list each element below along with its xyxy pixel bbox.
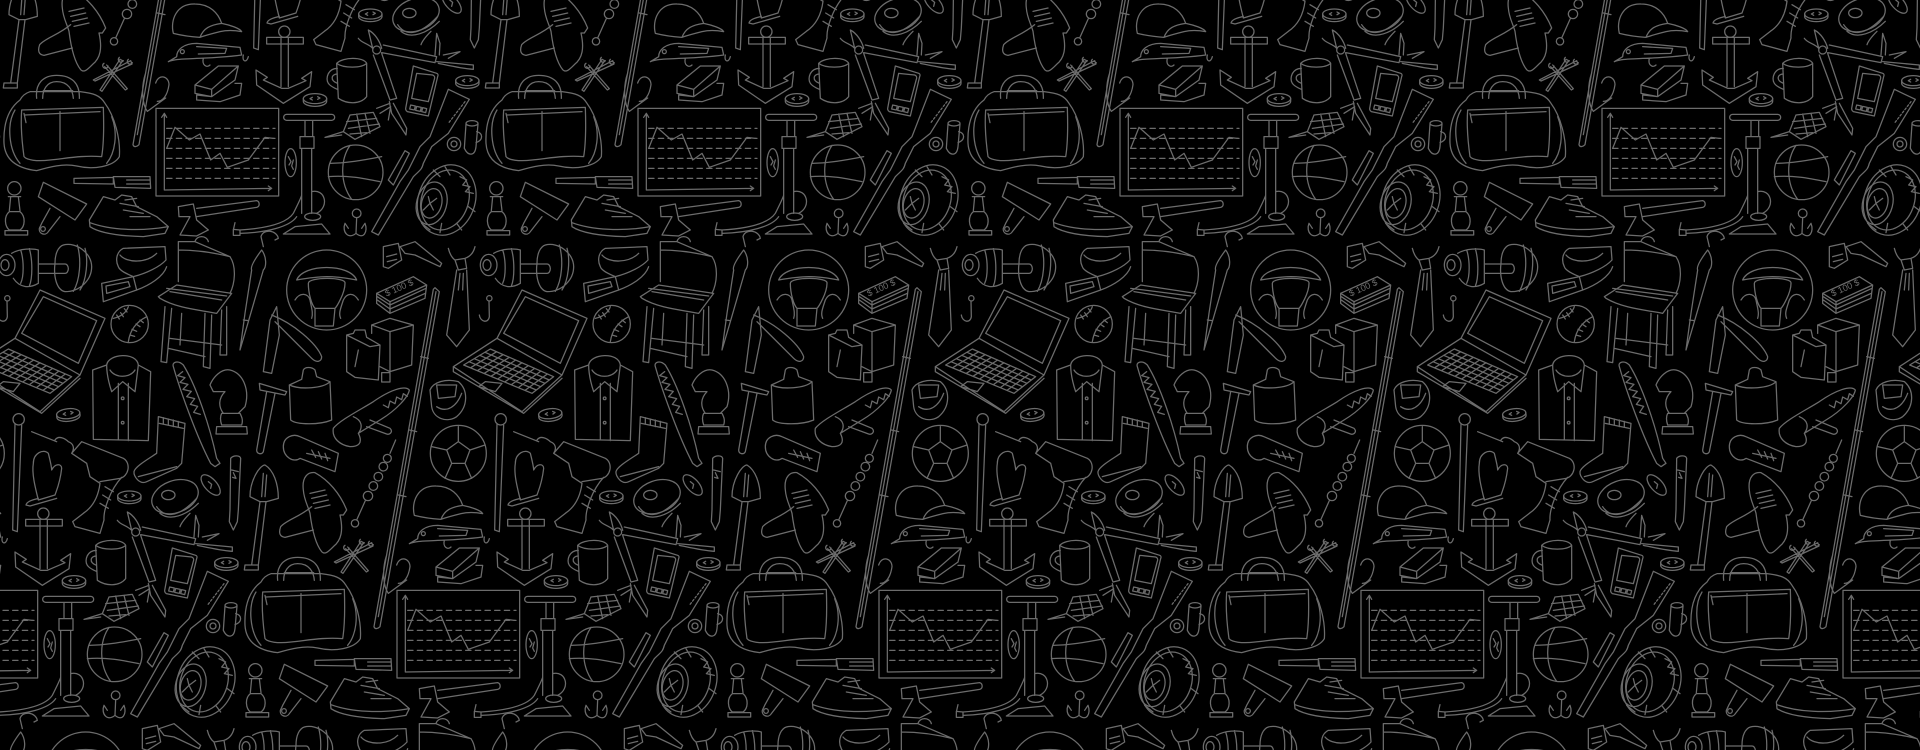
icon: straight razor	[263, 307, 322, 373]
pattern tile	[0, 4, 492, 629]
icon: fishing line spool	[147, 473, 203, 527]
icon: coin	[303, 94, 327, 106]
icon: sock	[134, 417, 185, 482]
icon: laptop	[0, 290, 105, 413]
icon: duffel bag	[4, 75, 120, 171]
icon: treble hook	[344, 209, 366, 236]
icon: bicycle pump	[233, 114, 335, 235]
icon: fishing rod	[374, 288, 439, 629]
upper doodle group	[4, 4, 486, 244]
icon: chess pawn	[5, 182, 28, 235]
icon: dumbbell	[0, 244, 92, 292]
icon: car key	[383, 242, 442, 268]
icon: coin	[456, 76, 479, 88]
icon: sneaker	[89, 195, 168, 237]
icon: banknote stack: $ 100 $	[383, 277, 415, 298]
icon: flask and box	[347, 318, 413, 382]
icon: shotgun shell	[447, 121, 482, 154]
icon: nails	[93, 57, 132, 91]
lower doodle group	[0, 231, 492, 629]
icon: walking stick	[13, 414, 24, 532]
icon: multi-tool	[358, 30, 473, 135]
icon: baseball	[111, 305, 148, 343]
icon: chess knight	[210, 370, 247, 434]
icon: cap	[173, 4, 242, 37]
icon: rifle	[372, 89, 469, 235]
icon: banknote stack	[377, 277, 427, 313]
icon: steering wheel	[287, 250, 367, 330]
icon: belt	[102, 247, 167, 302]
icon: shovel	[244, 465, 278, 570]
icon: bait feeder	[325, 112, 380, 139]
icon: fountain pen	[229, 456, 241, 530]
icon: coin on edge	[198, 472, 224, 498]
icon: coin on edge	[285, 149, 296, 177]
icon: necktie	[447, 247, 475, 347]
icon: folding stool	[158, 237, 234, 368]
icon: kebab skewer	[351, 440, 396, 527]
icon: coin	[118, 491, 141, 504]
icon: boxing glove	[283, 435, 338, 472]
icon: umbrella	[240, 231, 278, 350]
icon: mug	[327, 58, 367, 103]
icon: axe	[178, 201, 259, 236]
icon: hammer	[257, 383, 287, 454]
icon: basketball	[328, 145, 383, 200]
icon: fishing lure	[168, 43, 248, 66]
icon: dress shoes	[280, 473, 347, 553]
icon: wristwatch	[408, 156, 486, 244]
icon: phone	[406, 66, 438, 116]
chart: stock board	[156, 108, 279, 196]
icon: bricks	[195, 66, 242, 102]
icon: soccer ball	[430, 425, 486, 481]
icon: baseball bat	[173, 362, 220, 467]
icon: coin	[56, 407, 81, 423]
icon: hip flask	[289, 367, 332, 424]
icon: oven mitt	[26, 451, 62, 506]
icon: screwdriver	[74, 177, 151, 188]
icon: small hook	[479, 296, 492, 321]
icon: angle grinder	[333, 388, 409, 447]
icon: scraper	[38, 182, 87, 234]
icon: folded shirt	[93, 356, 151, 441]
icon: signet ring	[430, 380, 466, 420]
icon: power drill	[32, 432, 128, 533]
icon: anchor	[256, 26, 312, 103]
